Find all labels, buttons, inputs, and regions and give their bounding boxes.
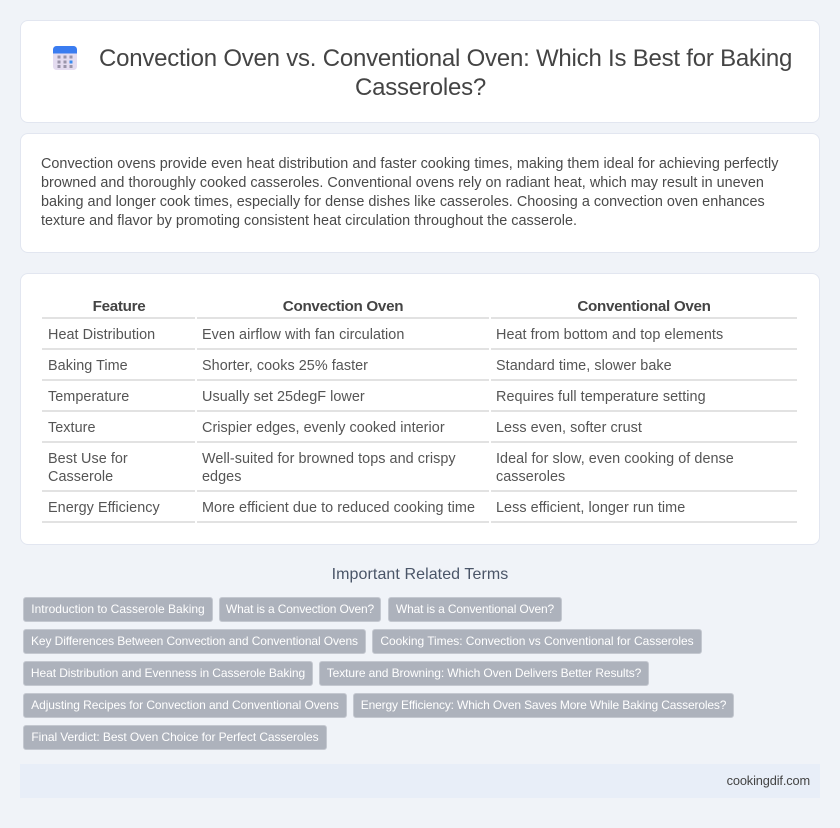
tag [23,661,313,686]
tag: Key Differences Between Convection and Conventional Ovens [31,634,358,648]
panel: comparison table card [20,273,820,545]
row: Texture [48,420,642,436]
panel: title card [20,20,820,123]
row: Energy Efficiency [48,500,685,516]
intro paragraph [41,156,778,229]
tag: Heat Distribution and Evenness in Casserole Baking [31,666,305,680]
row: Heat Distribution [48,327,723,343]
footer [20,764,820,798]
row: Heat Distribution: Even airflow with fan circulation [202,327,404,343]
row: Temperature: Temperature [48,389,129,405]
row: Texture: Texture [48,420,96,436]
row: Heat Distribution: Heat Distribution [48,327,155,343]
tag [219,597,381,622]
tag: What is a Convection Oven? [226,602,374,616]
title: Convection Oven vs. Conventional Oven: Which Is Best for Baking [99,45,792,72]
tag [319,661,649,686]
tag: Adjusting Recipes for Convection and Conventional Ovens [31,698,339,712]
tag: Final Verdict: Best Oven Choice for Perfect Casseroles [31,730,319,744]
tag [353,693,734,718]
tag [23,597,213,622]
intro paragraph: Convection ovens provide even heat distribution and faster cooking times, making them ideal for achieving perfectly [41,156,778,172]
tag: What is a Conventional Oven? [396,602,554,616]
intro paragraph: texture and flavor by promoting consistent heat circulation throughout the casserole. [41,213,577,229]
row: Baking Time [48,358,672,374]
header: Convection Oven: Convection Oven [283,298,403,315]
row: Energy Efficiency: More efficient due to reduced cooking time [202,500,475,516]
intro paragraph: browned and thoroughly cooked casseroles. Conventional ovens rely on radiant heat, which may result in uneven [41,175,764,191]
footer source: cookingdif.com [727,773,810,788]
tag: Energy Efficiency: Which Oven Saves More While Baking Casseroles? [361,698,726,712]
row: Best Use for Casserole: Well-suited for browned tops and crispy [202,451,456,467]
header: Feature: Feature [93,298,145,315]
row: Best Use for Casserole: casseroles [496,469,565,485]
tag: Cooking Times: Convection vs Conventional for Casseroles [380,634,694,648]
related terms tags [23,597,734,750]
tag: Texture and Browning: Which Oven Delivers Better Results? [327,666,641,680]
row: Best Use for Casserole: edges [202,469,241,485]
row: Texture: Crispier edges, evenly cooked interior [202,420,445,436]
header: Conventional Oven: Conventional Oven [577,298,711,315]
row: Baking Time: Shorter, cooks 25% faster [202,358,368,374]
tag [372,629,702,654]
title: Casseroles? [355,74,486,101]
tag [388,597,562,622]
row: Heat Distribution: Heat from bottom and top elements [496,327,723,343]
row: Best Use for Casserole [48,451,734,485]
row: Baking Time: Standard time, slower bake [496,358,672,374]
row: Texture: Less even, softer crust [496,420,642,436]
icon: calendar [53,46,77,70]
row: Energy Efficiency: Energy Efficiency [48,500,160,516]
panel: intro text card [20,133,820,253]
title [99,45,792,101]
tag [23,693,347,718]
row: Temperature: Usually set 25degF lower [202,389,365,405]
comparison table [42,298,797,523]
row: Best Use for Casserole: Casserole [48,469,113,485]
row: Temperature: Requires full temperature setting [496,389,706,405]
tag [23,629,366,654]
tag [23,725,327,750]
intro paragraph: baking and longer cook times, especially for dense dishes like casseroles. Choosing a convection oven enhances [41,194,765,210]
row: Baking Time: Baking Time [48,358,128,374]
tag: Introduction to Casserole Baking [31,602,205,616]
row: Energy Efficiency: Less efficient, longer run time [496,500,685,516]
row: Temperature [48,389,706,405]
row: Best Use for Casserole: Best Use for [48,451,128,467]
row: Best Use for Casserole: Ideal for slow, even cooking of dense [496,451,734,467]
heading: Important Related Terms: Important Related Terms [332,566,508,583]
